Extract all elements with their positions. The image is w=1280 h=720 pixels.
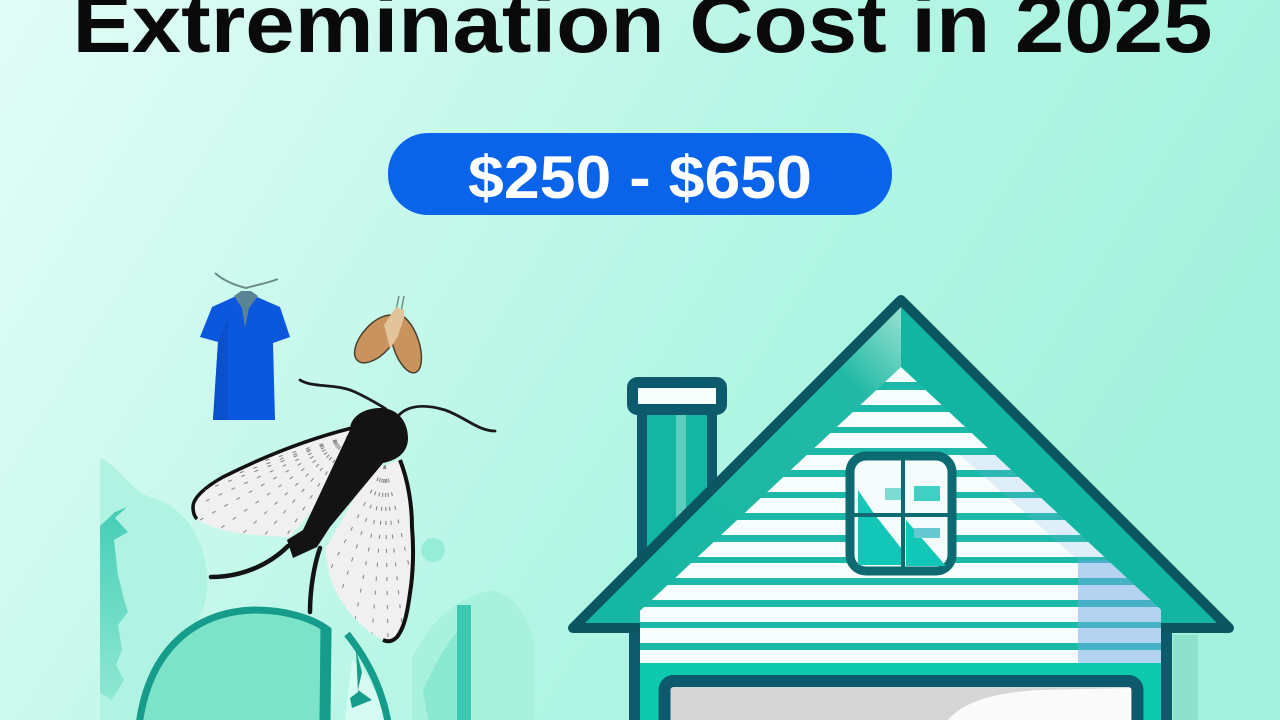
garage door: [664, 681, 1138, 720]
house: [573, 300, 1229, 720]
price pill: $250 - $650: [468, 144, 812, 211]
background foliage right: [412, 538, 535, 720]
icon: small brown moth: [346, 296, 428, 377]
siding stripes: [640, 360, 1161, 666]
right side wall shade: [1173, 635, 1198, 720]
window: [850, 456, 952, 571]
rounded green shape: [138, 610, 388, 720]
background foliage left: [100, 458, 207, 720]
roof: [573, 300, 1229, 628]
body and head: [287, 408, 408, 558]
garage wall: [634, 627, 1166, 720]
right wing: [325, 460, 413, 641]
left wing: [193, 428, 352, 538]
antennae: [300, 380, 495, 431]
icon: blue shirt on hanger: [200, 273, 290, 420]
legs: [211, 546, 320, 612]
icon: large moth: [193, 380, 495, 641]
price pill: [388, 133, 892, 215]
chimney: [632, 382, 722, 560]
